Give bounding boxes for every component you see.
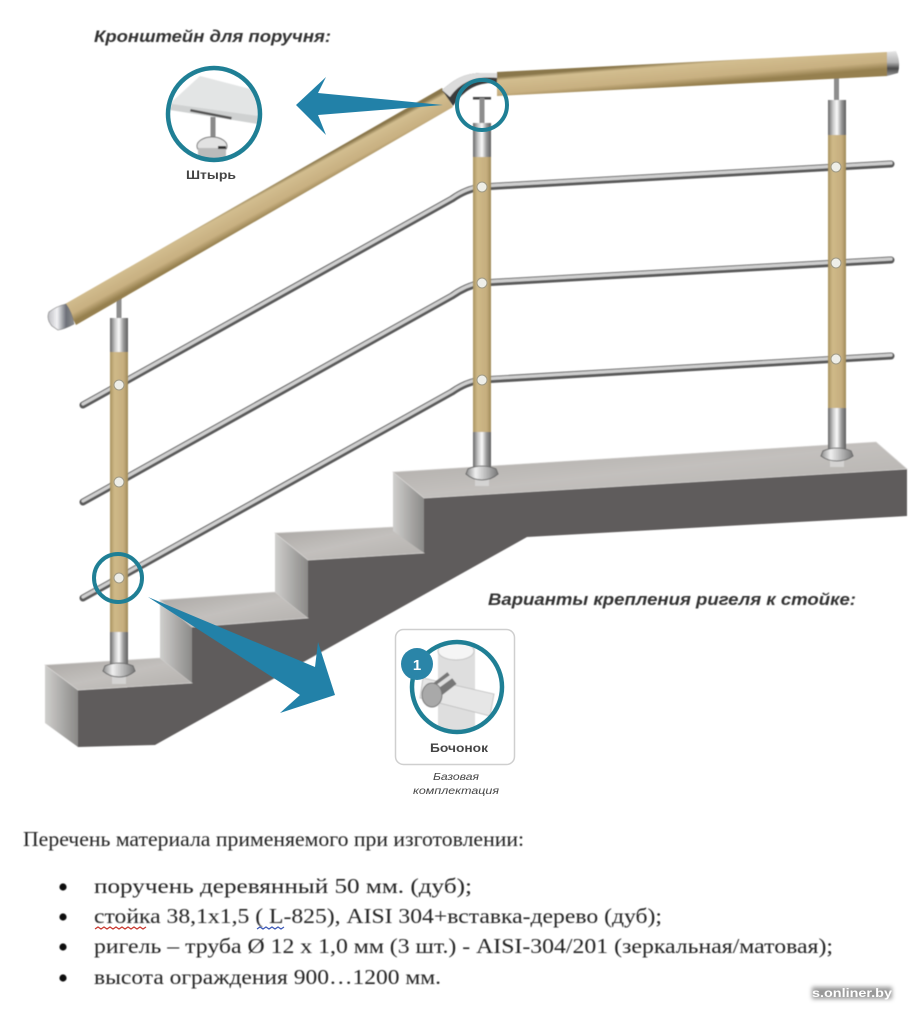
heading: handrail bracket: Кронштейн для поручня: xyxy=(94,28,331,46)
step 2 riser side xyxy=(160,600,192,683)
detail caption: Штырь xyxy=(186,168,236,182)
card frame xyxy=(396,630,514,764)
detail circle contents xyxy=(170,76,258,158)
highlight circle: rail connector xyxy=(94,554,142,602)
steel rails xyxy=(83,163,891,598)
item: post: стойка 38,1х1,5 ( L-825), AISI 304+вставка-дерево (дуб); xyxy=(94,904,662,928)
illustration ring xyxy=(412,642,502,732)
level end cap xyxy=(887,51,899,76)
landing riser side xyxy=(393,472,424,553)
watermark: s.onliner.by xyxy=(812,988,893,1000)
arrow: to bracket detail xyxy=(296,77,443,135)
badge number: 1 xyxy=(413,657,421,674)
step 2 tread xyxy=(160,592,308,627)
step 1 end face xyxy=(45,665,78,747)
steel bend xyxy=(442,73,498,106)
staircase dark front face xyxy=(78,469,907,747)
wooden handrail xyxy=(48,51,899,330)
highlight circle: handrail bracket xyxy=(457,80,507,130)
bullets xyxy=(59,883,67,982)
detail: bracket pin xyxy=(165,68,262,182)
note: base kit: Базовая xyxy=(433,771,479,783)
heading: rail mounting options: Варианты крепления ригеля к стойке: xyxy=(488,591,856,609)
sloped handrail section xyxy=(65,88,453,325)
number badge xyxy=(401,648,433,680)
note: base kit xyxy=(413,771,499,797)
staircase xyxy=(45,442,907,747)
rail-to-post connectors xyxy=(114,162,841,583)
item: rail: ригель – труба Ø 12 х 1,0 мм (3 шт.) - AISI-304/201 (зеркальная/матовая); xyxy=(94,934,833,958)
materials heading: Перечень материала применяемого при изготовлении: xyxy=(23,827,524,851)
post: left xyxy=(103,296,135,684)
middle rail xyxy=(83,259,891,502)
step 1 tread xyxy=(45,658,192,690)
step 3 tread xyxy=(275,527,424,560)
post: right xyxy=(821,76,853,467)
sloped end cap xyxy=(48,304,74,330)
note: base kit: комплектация xyxy=(413,785,499,797)
detail circle ring xyxy=(168,68,260,160)
connector illustration xyxy=(420,640,494,735)
option card: barrel connector xyxy=(396,630,514,764)
item: height: высота ограждения 900…1200 мм. xyxy=(94,965,441,989)
spellcheck underlines xyxy=(95,927,284,929)
item: handrail: поручень деревянный 50 мм. (дуб); xyxy=(94,874,472,898)
upper rail xyxy=(83,163,891,405)
arrow: to connector options xyxy=(148,597,335,713)
step 3 riser side xyxy=(275,533,308,618)
materials list xyxy=(59,874,833,989)
post: middle xyxy=(466,97,498,486)
card caption: Бочонок xyxy=(430,741,489,755)
landing tread xyxy=(393,442,907,498)
level handrail section xyxy=(497,52,887,96)
lower rail xyxy=(83,355,891,598)
